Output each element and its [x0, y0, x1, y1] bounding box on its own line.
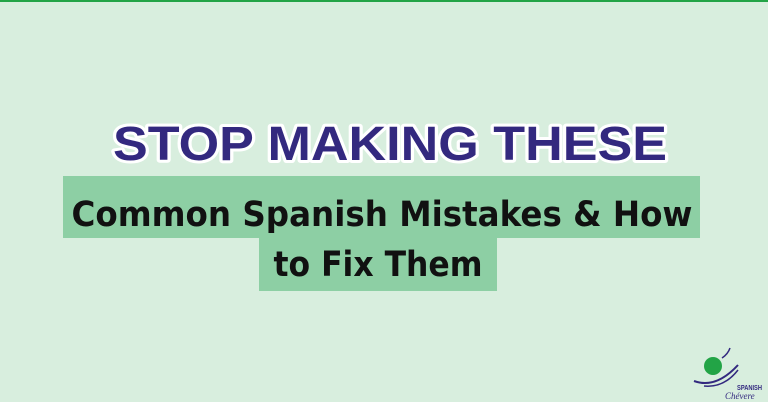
title: STOP MAKING THESE [113, 118, 667, 171]
logo: Spanish Chevere: SPANISH [737, 385, 762, 392]
subtitle line 2: to Fix Them [274, 245, 482, 285]
subtitle line 1: Common Spanish Mistakes & How [72, 195, 692, 235]
logo: Spanish Chevere: Chévere [725, 391, 755, 401]
logo: Spanish Chevere [694, 348, 762, 401]
subtitle box [63, 176, 700, 291]
